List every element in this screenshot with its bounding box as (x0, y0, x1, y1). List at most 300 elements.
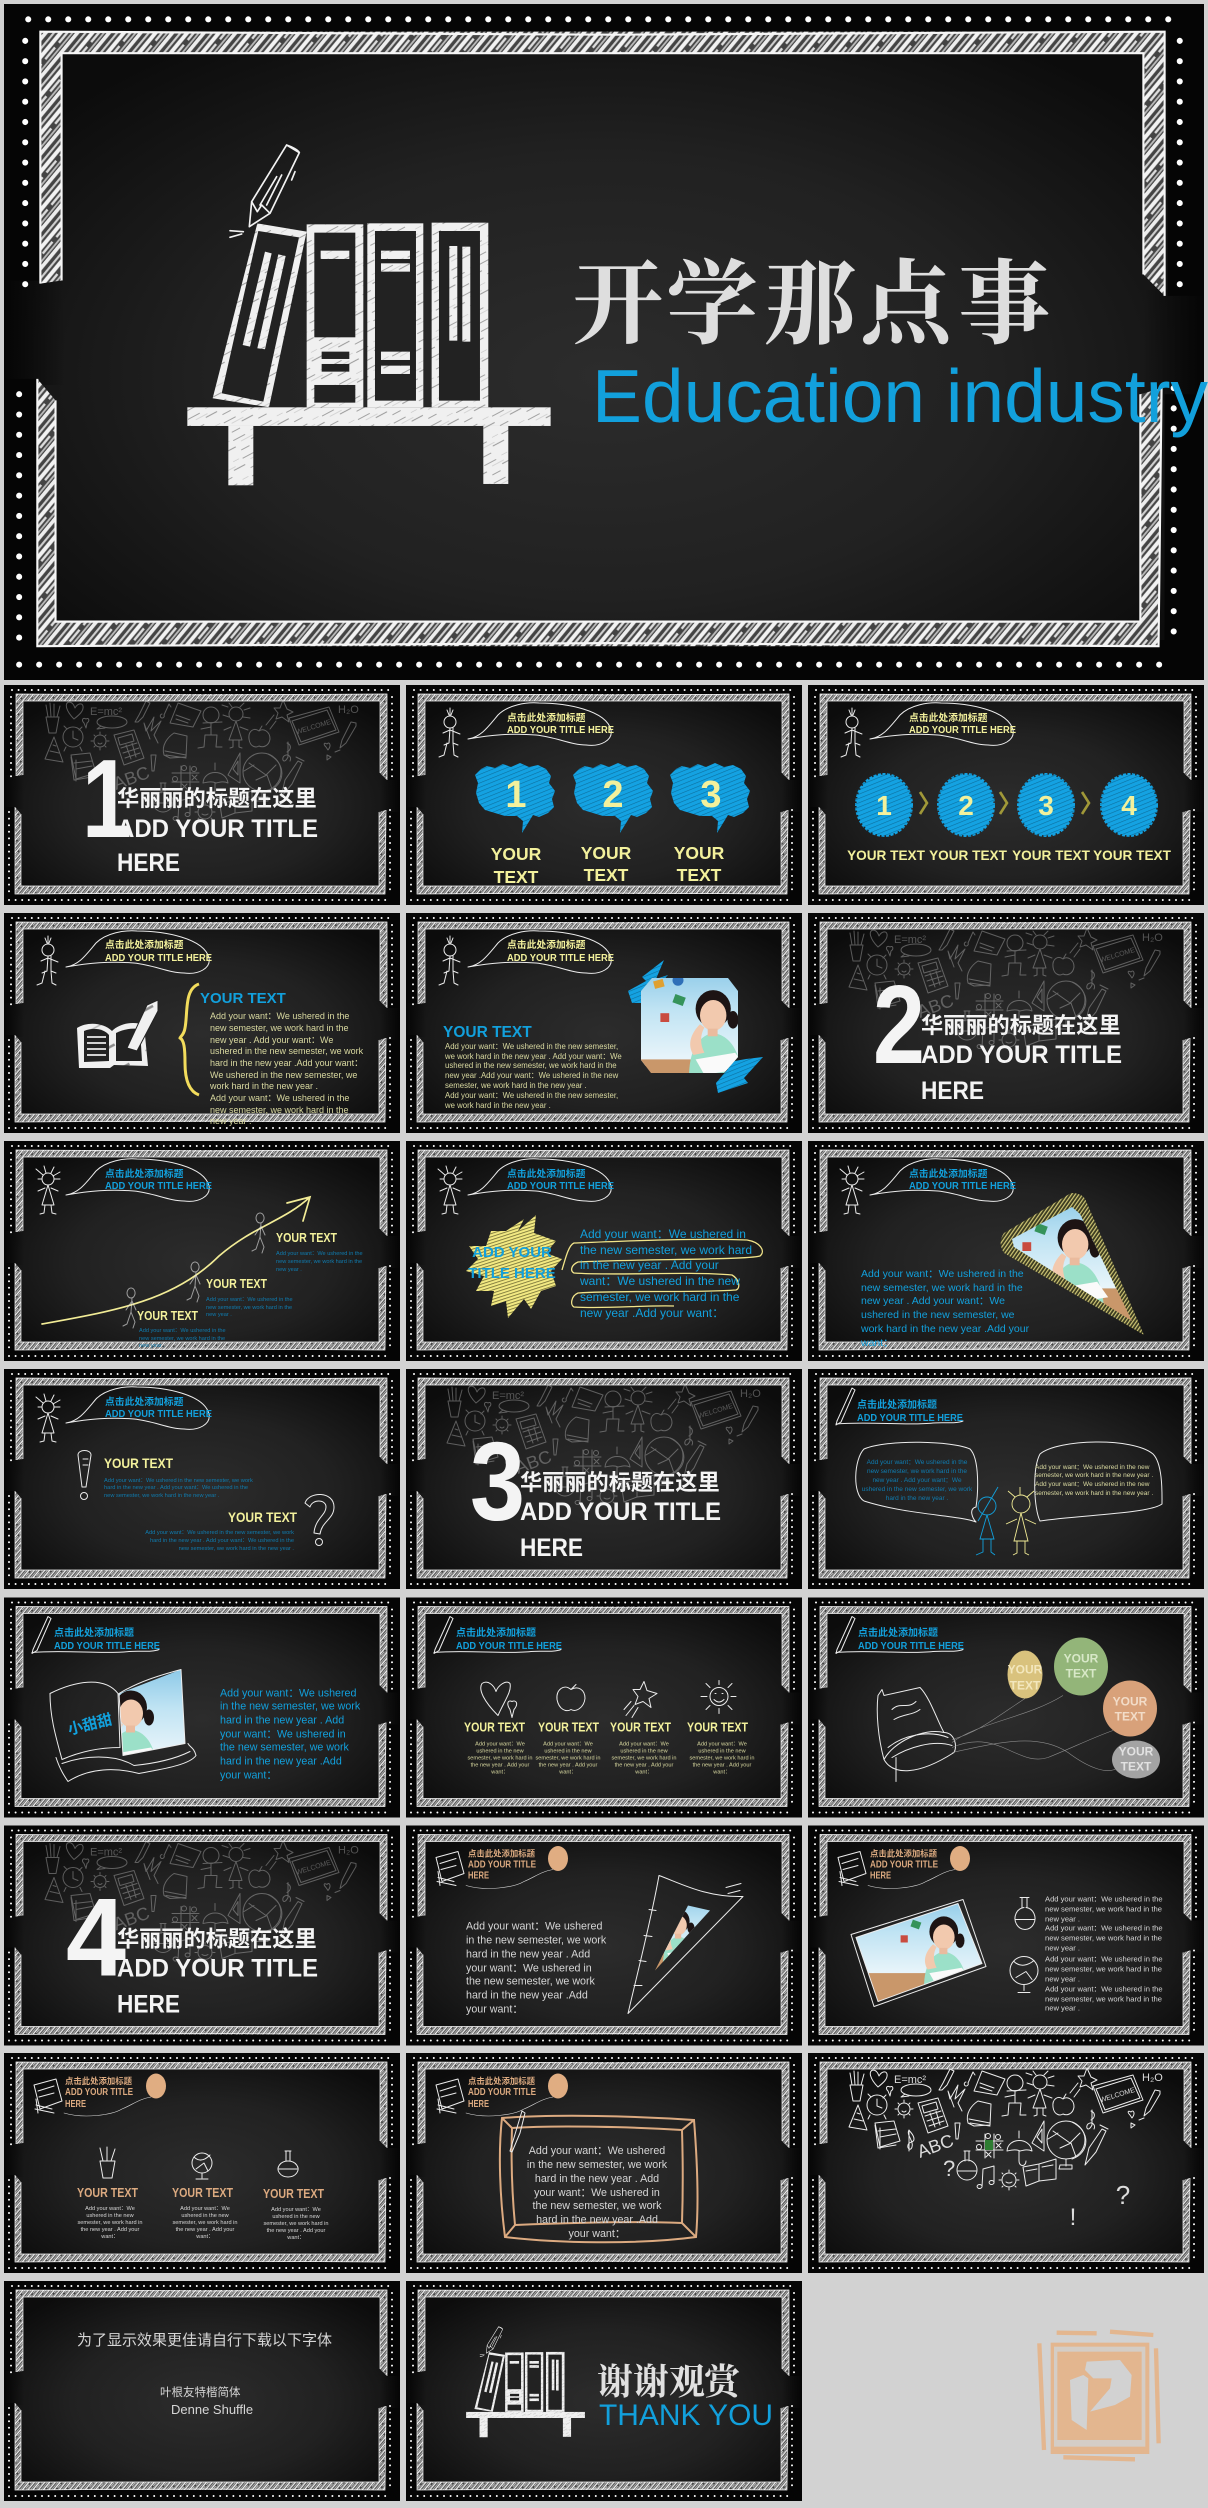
body text: new semester, we work hard in the new year . (179, 1546, 294, 1552)
section heading: HERE (921, 1077, 984, 1105)
doodle illustration (45, 1840, 359, 1962)
balloon: green (1054, 1638, 1108, 1696)
doodle illustration (849, 2068, 1163, 2190)
title with balloon: HERE (870, 1870, 891, 1882)
doodle illustration: ABC (111, 762, 152, 794)
title: 开学那点事 (572, 231, 1050, 363)
body text: hard in the new year .Add (220, 1756, 342, 1768)
title with balloon: HERE (468, 2099, 489, 2110)
text heading: YOUR TEXT (443, 1024, 532, 1041)
title bubble: 点击此处添加标题 (105, 1167, 184, 1180)
panel: thank you slide (406, 2281, 802, 2501)
photo of girl (120, 1670, 184, 1755)
panel: growth arrow slide (4, 1141, 400, 1361)
column text: want： (286, 2235, 305, 2241)
panel: section 4 slide (4, 1826, 400, 2046)
column headings: YOUR TEXT (464, 1720, 525, 1734)
icon: bookshelf with pencil (187, 145, 551, 485)
doodle illustration: ABC (915, 990, 956, 1022)
title bubble (438, 1159, 614, 1214)
doodle illustration (447, 1384, 761, 1506)
text heading: YOUR TEXT (228, 1509, 297, 1525)
doodle illustration: E=mc² (894, 2074, 926, 2086)
title bubble: ADD YOUR TITLE HERE (507, 725, 614, 736)
icon: sun (701, 1680, 736, 1714)
title bubble: ADD YOUR TITLE HERE (105, 1181, 212, 1192)
body text: hard in the new year . Add (220, 1714, 344, 1726)
section number: 4 (66, 1876, 126, 2000)
column text: the new year . Add your (81, 2227, 140, 2233)
step descriptions: new year . (139, 1343, 165, 1349)
body text: new year .Add your want： (580, 1306, 724, 1320)
body text: hard in the new year .Add (536, 2214, 658, 2226)
title with balloon: 点击此处添加标题 (65, 2076, 133, 2086)
section heading (117, 786, 318, 877)
step descriptions: new semester, we work hard in the (206, 1305, 292, 1311)
body text: Add your want：We ushered in the (1045, 1954, 1163, 1964)
blue number bubbles: 2 (602, 774, 624, 816)
doodle illustration: ? (943, 2156, 955, 2181)
title bubble (439, 703, 614, 757)
right speech bubble: Add your want：We ushered in the new (1035, 1481, 1150, 1488)
panel: speech bubbles slide (808, 1369, 1204, 1589)
body text: we work hard in the new year . (444, 1101, 551, 1110)
icon: hearts (481, 1682, 517, 1718)
body text: new year . (1045, 2004, 1080, 2012)
doodle illustration: E=mc² (90, 1846, 122, 1858)
column text: semester, we work hard in (690, 1756, 754, 1762)
title with balloon: 点击此处添加标题 (468, 1848, 536, 1858)
column text: want： (100, 2234, 119, 2240)
panel: book and text slide (4, 913, 400, 1133)
font name: Chinese: 叶根友特楷简体 (160, 2385, 241, 2399)
bubble labels: TEXT (494, 867, 539, 887)
icon: bookshelf with pencil (466, 2327, 585, 2437)
doodle illustration: E=mc² (492, 1390, 524, 1402)
panel: yellow scribble slide (406, 1141, 802, 1361)
column text: the new year . Add your (176, 2227, 235, 2233)
icon: exclamation mark (78, 1450, 91, 1500)
body text: new semester, we work hard in the (861, 1282, 1023, 1294)
left speech bubble: ushered in the new semester, we work (862, 1486, 973, 1493)
balloon: yellow: YOUR (1008, 1662, 1043, 1676)
section heading: 华丽丽的标题在这里 (921, 1013, 1121, 1038)
title with pen: ADD YOUR TITLE HERE (54, 1641, 160, 1652)
body text: Add your want：We ushered in the new semester, (445, 1091, 618, 1100)
body text: new semester, we work hard in the (1045, 1904, 1162, 1914)
step descriptions: Add your want：We ushered in the (276, 1251, 363, 1257)
body text: ushered in the new semester, we work hard in the (445, 1061, 617, 1070)
thank you subtitle: THANK YOU (599, 2399, 773, 2432)
body text: new year . Add your want：We (210, 1035, 333, 1045)
photo frame drawing (851, 1900, 986, 2006)
left speech bubble: new semester, we work hard in the (867, 1468, 967, 1475)
title bubble: ADD YOUR TITLE HERE (105, 953, 212, 964)
title with balloon (34, 2074, 166, 2116)
title bubble: ADD YOUR TITLE HERE (105, 1409, 212, 1420)
column text: want： (490, 1770, 509, 1776)
pennant drawing (628, 1876, 743, 2014)
doodle illustration: ABC (111, 1903, 152, 1934)
column text: semester, we work hard in (468, 1756, 532, 1762)
step circles (856, 774, 1156, 836)
title bubble (841, 703, 1016, 757)
column headings (464, 1720, 748, 1734)
yellow stick figure (1006, 1487, 1036, 1555)
photo of girl (856, 1904, 982, 2001)
body text: hard in the new year .Add (466, 1990, 588, 2002)
section heading: ADD YOUR TITLE (520, 1498, 721, 1526)
body text: new year . (1045, 1974, 1080, 1984)
body text: Add your want：We ushered in the new semester, we work (145, 1530, 294, 1536)
title bubble: 点击此处添加标题 (507, 1167, 586, 1180)
balloon: green: YOUR (1064, 1652, 1099, 1666)
column text: ushered in the new (181, 2213, 230, 2219)
title with pen: 点击此处添加标题 (858, 1626, 938, 1639)
column text: Add your want：We (271, 2207, 321, 2213)
panel: question marks slide (4, 1369, 400, 1589)
left speech bubble: new year . Add your want：We (872, 1477, 962, 1484)
column text (468, 1742, 754, 1776)
panel: balloons slide (808, 1598, 1204, 1818)
step descriptions: new year . (276, 1267, 302, 1273)
title with pen: ADD YOUR TITLE HERE (858, 1641, 964, 1652)
body text: Add your want：We ushered in (580, 1227, 746, 1241)
chevron arrows (920, 792, 1089, 814)
step labels: YOUR TEXT (276, 1231, 337, 1245)
balloon: grey: YOUR (1119, 1744, 1154, 1758)
step circles: 3 (1038, 790, 1054, 821)
title bubble: ADD YOUR TITLE HERE (909, 1181, 1016, 1192)
title bubble (840, 1159, 1016, 1214)
body text: semester, we work hard in the new year . (445, 1081, 587, 1090)
body text: your want：We ushered in (466, 1962, 592, 1974)
title with balloon: ADD YOUR TITLE (65, 2087, 133, 2098)
body text: hard in the new year . Add your want：We ushered in the (104, 1485, 248, 1491)
left speech bubble (856, 1442, 978, 1522)
body text: Add your want：We ushered in the new semester, (445, 1042, 618, 1051)
blue number bubbles: 1 (505, 774, 527, 816)
scribble heading: ADD YOUR (472, 1244, 552, 1261)
body text: your want：We ushered in (220, 1728, 346, 1740)
icon: star (624, 1682, 657, 1718)
icon: notebook (877, 1688, 956, 1782)
blue stick figure (976, 1487, 998, 1555)
bubble labels: YOUR (491, 844, 542, 864)
icon: exclamation mark: ! (1070, 2204, 1076, 2231)
column text: Add your want：We (180, 2206, 230, 2212)
section number: 3 (470, 1420, 525, 1544)
blue number bubbles (475, 763, 750, 833)
icon: apple (557, 1684, 585, 1711)
body text: ushered in the new semester, we (861, 1309, 1015, 1321)
column headings: YOUR TEXT (610, 1720, 671, 1734)
icon: pencil cup (100, 2147, 115, 2178)
column text: ushered in the new (698, 1748, 747, 1754)
body text: Add your want：We ushered in the (861, 1268, 1024, 1280)
doodle illustration: WELCOME (1099, 2087, 1136, 2104)
section heading: 华丽丽的标题在这里 (117, 786, 317, 811)
panel: peach frame slide (406, 2053, 802, 2273)
yellow scribble (466, 1215, 562, 1318)
body text: Add your want：We ushered in the (1045, 1984, 1163, 1994)
step descriptions: new semester, we work hard in the (276, 1259, 362, 1265)
section heading (921, 1013, 1122, 1105)
column text: the new year . Add your (693, 1762, 752, 1768)
section heading: ADD YOUR TITLE (117, 815, 318, 843)
title bubble: 点击此处添加标题 (105, 938, 184, 951)
column text: want： (195, 2234, 214, 2240)
body text: Add your want：We ushered in the (1045, 1894, 1163, 1904)
doodle illustration: WELCOME (295, 1859, 332, 1877)
yellow underline loop (562, 1239, 762, 1308)
icon: open book and pencil (77, 1000, 158, 1068)
column text: Add your want：We (85, 2206, 135, 2212)
column headings: YOUR TEXT (172, 2185, 233, 2200)
title bubble: 点击此处添加标题 (507, 938, 586, 951)
text heading: YOUR TEXT (200, 990, 286, 1007)
doodle illustration: WELCOME (697, 1403, 734, 1420)
column text: Add your want：We (475, 1742, 525, 1748)
balloon: yellow: TEXT (1010, 1678, 1041, 1692)
column text: the new year . Add your (267, 2228, 326, 2234)
balloon: green: TEXT (1066, 1666, 1097, 1680)
column text: ushered in the new (476, 1748, 525, 1754)
title with balloon (436, 1846, 568, 1888)
section heading: 华丽丽的标题在这里 (117, 1926, 317, 1952)
body text: your want： (220, 1770, 277, 1782)
section heading (520, 1470, 721, 1562)
icon: flask (1015, 1898, 1035, 1929)
body text: hard in the new year . Add your want：We ushered in the (150, 1538, 294, 1544)
body text: hard in the new year .Add your want： (210, 1058, 363, 1068)
doodle illustration: H₂O (1142, 2072, 1163, 2084)
section heading: HERE (117, 849, 180, 877)
body text: Add your want：We ushered (529, 2145, 665, 2157)
column text (78, 2206, 328, 2241)
body text: your want：We ushered in (534, 2187, 660, 2199)
title bubble: ADD YOUR TITLE HERE (507, 1181, 614, 1192)
title bubble (36, 1387, 212, 1442)
body text: in the new semester, we work (527, 2159, 668, 2171)
kite frame (1001, 1193, 1144, 1335)
title with balloon: ADD YOUR TITLE (468, 1860, 536, 1870)
panel: section 3 slide (406, 1369, 802, 1589)
section heading: 华丽丽的标题在这里 (520, 1470, 720, 1495)
panel: four icons slide (406, 1598, 802, 1818)
body text: hard in the new year . Add (466, 1948, 590, 1960)
title with pen (434, 1616, 562, 1654)
column text: want： (634, 1770, 653, 1776)
doodle illustration: ABC (513, 1446, 554, 1478)
doodle illustration: E=mc² (894, 934, 926, 946)
step circles: 1 (876, 790, 892, 821)
doodle illustration: H₂O (740, 1388, 761, 1400)
title with balloon (838, 1846, 970, 1888)
right speech bubble: semester, we work hard in the new year . (1035, 1472, 1153, 1479)
title with pen: ADD YOUR TITLE HERE (857, 1413, 963, 1424)
icon: question mark: ? (1116, 2180, 1130, 2210)
panel: kite photo slide (808, 1141, 1208, 1361)
column text: ushered in the new (86, 2213, 135, 2219)
doodle illustration: H₂O (338, 704, 359, 716)
body text: in the new semester, we work (466, 1934, 607, 1946)
bubble labels: TEXT (677, 865, 722, 885)
body text: in the new semester, we work (220, 1700, 361, 1712)
body text: we work hard in the new year . Add your want：We (444, 1052, 622, 1061)
section number: 2 (873, 963, 925, 1087)
text heading: YOUR TEXT (104, 1455, 173, 1471)
step descriptions: Add your want：We ushered in the (206, 1297, 293, 1303)
body text: ushered in the new semester, we work (210, 1046, 364, 1056)
step labels: YOUR TEXT (847, 848, 926, 863)
body text: new year .Add your want：We ushered in the new (445, 1071, 619, 1080)
doodle illustration: ABC (915, 2130, 956, 2162)
panel: cover slide (4, 4, 1208, 680)
title with pen: ADD YOUR TITLE HERE (456, 1641, 562, 1652)
body text: the new semester, we work (220, 1742, 350, 1754)
body text: in the new year . Add your (580, 1258, 719, 1272)
step labels: YOUR TEXT (929, 848, 1008, 863)
panel: three numbered bubbles slide (406, 685, 802, 905)
doodle illustration: E=mc² (90, 706, 122, 718)
body text: new semester, we work hard in the (210, 1105, 349, 1115)
yellow brace (180, 984, 199, 1095)
right speech bubble (1035, 1442, 1162, 1521)
title with pen (836, 1616, 964, 1654)
body text: new semester, we work hard in the new year . (104, 1493, 220, 1499)
column text: Add your want：We (619, 1742, 669, 1748)
title bubble (439, 931, 614, 985)
panel: four step process slide (808, 685, 1204, 905)
panel: section 2 slide (808, 913, 1204, 1133)
section heading (117, 1926, 318, 2018)
section heading: HERE (117, 1990, 180, 2018)
column text: the new year . Add your (539, 1762, 598, 1768)
body text: work hard in the new year .Add your (860, 1323, 1030, 1335)
title bubble: ADD YOUR TITLE HERE (909, 725, 1016, 736)
column headings: YOUR TEXT (263, 2186, 324, 2201)
icon: pencil (510, 2111, 525, 2152)
doodle illustration: WELCOME (1099, 947, 1136, 964)
climbing figures (123, 1213, 265, 1328)
step labels: YOUR TEXT (1093, 848, 1172, 863)
body text: new semester, we work hard in the (1045, 1934, 1162, 1942)
title with balloon: ADD YOUR TITLE (870, 1860, 938, 1870)
step descriptions: new year . (206, 1312, 232, 1318)
body text: your want： (568, 2228, 626, 2240)
body text: semester, we work hard in the (580, 1290, 740, 1304)
photo of girl (641, 978, 738, 1073)
title with balloon: 点击此处添加标题 (468, 2076, 536, 2086)
body text: the new semester, we work (533, 2200, 662, 2212)
step descriptions (139, 1251, 363, 1349)
section heading: HERE (520, 1534, 583, 1562)
body text: Add your want：We ushered in the new semester, we work (104, 1478, 253, 1484)
thank you heading: 谢谢观赏 (597, 2354, 744, 2405)
balloon: grey (1112, 1740, 1160, 1778)
doodle illustration (45, 700, 359, 822)
bubble labels: YOUR (674, 843, 725, 863)
balloon: orange: TEXT (1115, 1710, 1146, 1724)
column headings: YOUR TEXT (538, 1720, 599, 1734)
title bubble: 点击此处添加标题 (507, 711, 586, 724)
title with pen: 点击此处添加标题 (456, 1626, 536, 1639)
photo of girl (655, 1906, 710, 1970)
title with balloon: HERE (65, 2099, 86, 2110)
body text: new semester, we work hard in the (1045, 1964, 1162, 1974)
title with pen: 点击此处添加标题 (857, 1398, 937, 1411)
column text: the new year . Add your (615, 1762, 674, 1768)
panel: doodle slide (808, 2053, 1204, 2273)
icon: question mark (305, 1494, 334, 1546)
balloon: orange (1103, 1680, 1157, 1736)
title bubble: 点击此处添加标题 (105, 1395, 184, 1408)
right speech bubble: Add your want：We ushered in the new (1035, 1464, 1150, 1471)
column text: semester, we work hard in (264, 2221, 328, 2227)
step circles: 2 (958, 790, 974, 821)
scribble heading (468, 1244, 556, 1282)
column text: semester, we work hard in (78, 2220, 142, 2226)
section heading: ADD YOUR TITLE (117, 1954, 318, 1982)
peach hand-drawn frame (500, 2116, 697, 2242)
bubble labels: TEXT (584, 865, 629, 885)
step descriptions: Add your want：We ushered in the (139, 1328, 226, 1334)
blue scribbles (628, 960, 763, 1093)
body text: work hard in the new year . (209, 1081, 318, 1091)
step labels: YOUR TEXT (137, 1309, 198, 1323)
balloon: yellow (1008, 1650, 1043, 1698)
body text: new semester, we work hard in the (210, 1023, 349, 1033)
panel: pennant photo slide (406, 1826, 802, 2046)
title with balloon (436, 2074, 568, 2116)
body text: Add your want：We ushered (220, 1688, 356, 1700)
body text: new year . (1045, 1914, 1080, 1924)
bubble labels: YOUR (581, 843, 632, 863)
balloon strings (952, 1696, 1118, 1771)
column text: semester, we work hard in (536, 1756, 600, 1762)
title with balloon: 点击此处添加标题 (870, 1848, 938, 1858)
step labels (847, 848, 1172, 863)
section number: 1 (82, 737, 132, 861)
panel: photo album slide (0, 1598, 400, 1818)
body text: Add your want：We ushered (466, 1920, 602, 1932)
step labels: YOUR TEXT (1012, 848, 1091, 863)
body text: the new semester, we work hard (580, 1243, 752, 1257)
title with balloon: ADD YOUR TITLE (468, 2087, 536, 2098)
panel: font notice slide (4, 2281, 400, 2501)
left speech bubble: hard in the new year . (886, 1495, 948, 1502)
title bubble (36, 1159, 212, 1214)
body text: the new semester, we work (466, 1976, 596, 1988)
column headings: YOUR TEXT (687, 1720, 748, 1734)
doodle illustration: H₂O (1142, 932, 1163, 944)
column headings (77, 2185, 324, 2201)
blue number bubbles: 3 (700, 774, 722, 816)
title with pen (836, 1388, 963, 1425)
title bubble: 点击此处添加标题 (909, 1167, 988, 1180)
panel: tilted photo slide (798, 1826, 1204, 2046)
body text: want：We ushered in the new (579, 1274, 740, 1288)
right speech bubble: semester, we work hard in the new year . (1035, 1490, 1153, 1497)
body text: your want： (466, 2004, 523, 2016)
step labels: YOUR TEXT (206, 1277, 267, 1291)
growth curve arrow (42, 1197, 310, 1324)
scribble heading: TITLE HERE (468, 1265, 556, 1282)
column text: Add your want：We (543, 1742, 593, 1748)
body text: new year . (1045, 1944, 1080, 1952)
photo of girl (1012, 1207, 1132, 1321)
